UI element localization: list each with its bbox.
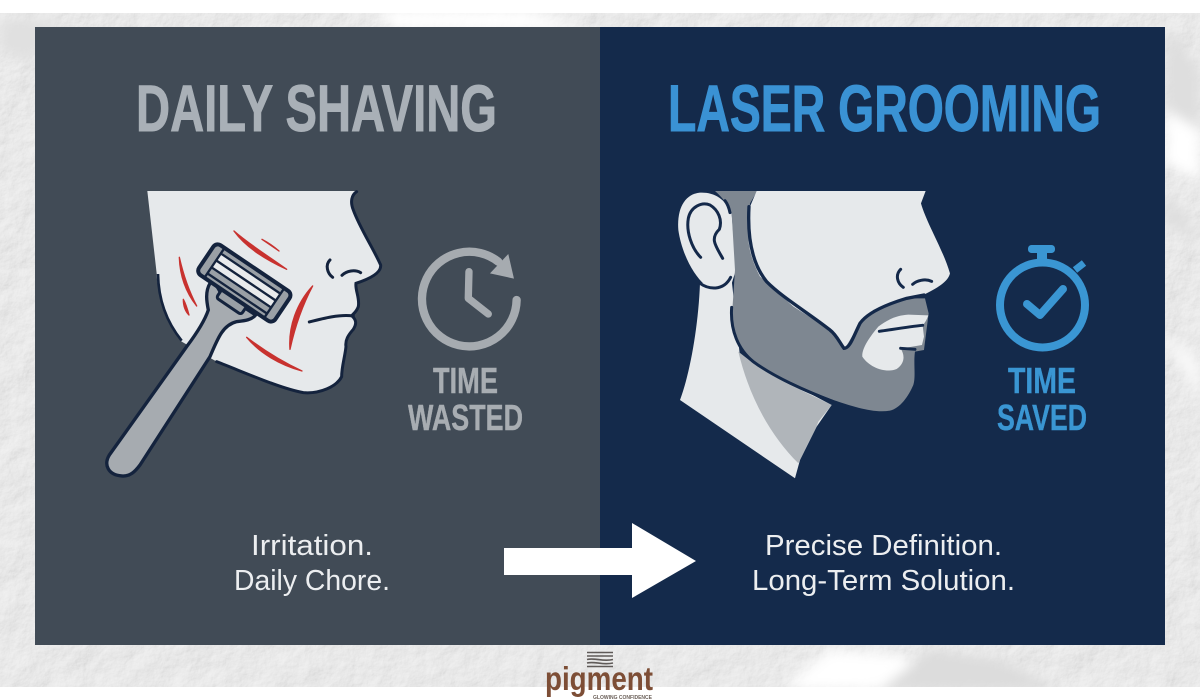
face bbox=[748, 191, 950, 348]
lips and chin patch bbox=[862, 315, 928, 371]
right panel background bbox=[600, 27, 1165, 645]
jaw outline bbox=[158, 274, 182, 341]
face outline bbox=[217, 192, 381, 393]
label: time wasted: TIME bbox=[433, 360, 498, 401]
beard and face lines bbox=[749, 207, 924, 348]
caption: precise definition, long-term solution: Long-Term Solution. bbox=[752, 565, 1015, 597]
neck bbox=[680, 280, 832, 478]
left panel background bbox=[35, 27, 600, 645]
white bottom edge bbox=[0, 687, 1200, 700]
icon: clock with arrow bbox=[422, 252, 517, 346]
logo mark bbox=[587, 652, 613, 666]
neck shadow bbox=[738, 352, 832, 463]
caption: irritation, daily chore: Daily Chore. bbox=[234, 565, 390, 597]
nose and mouth lines bbox=[309, 260, 361, 322]
mouth and nostril lines bbox=[879, 269, 932, 349]
label: time saved: SAVED bbox=[997, 397, 1087, 438]
label: time wasted bbox=[408, 360, 523, 438]
arrow bbox=[504, 523, 696, 598]
panel: laser grooming bbox=[600, 27, 1165, 645]
heading: daily shaving: DAILY SHAVING bbox=[136, 71, 497, 145]
logo: pigment bbox=[545, 652, 653, 700]
label: time saved: TIME bbox=[1008, 360, 1076, 401]
caption: precise definition, long-term solution: Precise Definition. bbox=[765, 530, 1002, 562]
label: time saved bbox=[997, 360, 1087, 438]
icon: stopwatch with check bbox=[1000, 245, 1085, 348]
caption: irritation, daily chore bbox=[234, 530, 390, 597]
panel: daily shaving bbox=[35, 27, 600, 645]
razor head bbox=[191, 242, 293, 332]
beard bbox=[715, 191, 929, 411]
face profile bbox=[147, 191, 380, 393]
label: time wasted: WASTED bbox=[408, 397, 523, 438]
caption: precise definition, long-term solution bbox=[752, 530, 1015, 597]
razor handle bbox=[107, 283, 256, 476]
irritation marks bbox=[179, 231, 313, 371]
logo wordmark: pigment bbox=[545, 660, 653, 697]
jaw line bbox=[731, 307, 833, 402]
white top edge bbox=[0, 0, 1200, 13]
illustration: shaved face with razor bbox=[107, 191, 381, 476]
caption: irritation, daily chore: Irritation. bbox=[251, 530, 373, 562]
ear lines bbox=[688, 201, 731, 288]
illustration: groomed beard profile bbox=[678, 191, 950, 478]
ear bbox=[678, 193, 736, 290]
